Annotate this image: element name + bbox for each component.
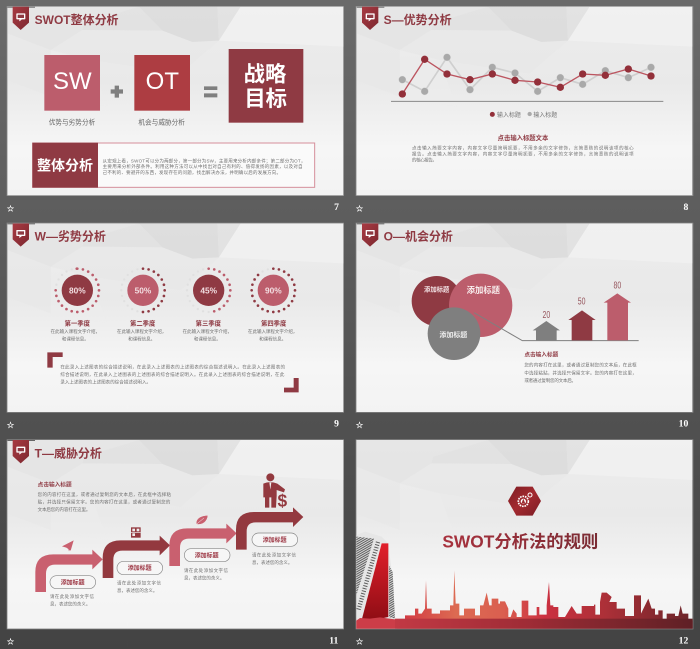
icon: businessman with dollar: $	[278, 490, 288, 510]
label Q4: 和课程信息。	[259, 335, 286, 342]
strategy goal box: 目标	[244, 87, 287, 111]
OT square	[134, 55, 190, 111]
footer star: ☆	[356, 421, 364, 431]
footer star: ☆	[356, 204, 364, 214]
footer star: ☆	[7, 421, 15, 431]
donut 80%: 80%	[69, 285, 86, 295]
body text: 中选择粘贴，并选择只保留文字。您的内容打在这里，	[524, 369, 637, 376]
donut 45%	[187, 269, 230, 312]
arrow step 3	[169, 524, 237, 566]
donut 90%: 90%	[265, 285, 282, 295]
body text	[60, 363, 285, 385]
panel: slide 10 opportunities	[356, 223, 693, 431]
step 4 text: 息，表述您的含义。	[252, 559, 292, 566]
title: SWOT分析法的规则	[442, 532, 598, 552]
donut 45%: 45%	[200, 285, 218, 295]
step 1 pill	[50, 576, 96, 589]
arrow 80: 80	[613, 279, 621, 291]
line chart	[391, 54, 663, 101]
strategy goal box: 战略	[244, 63, 287, 87]
overview box: 主要用来分析外部条件。利用这种方法可以从中找出对自己有利的、值得发扬的因素，以及对自	[103, 163, 303, 170]
step 1 pill: 添加标题	[61, 578, 85, 586]
step 2 text	[117, 579, 161, 594]
label Q2: 和课程信息。	[128, 335, 155, 342]
icon: businessman with dollar	[263, 473, 288, 510]
subheading: 点击输入标题文本	[498, 133, 549, 142]
icon: leaf	[196, 515, 208, 525]
title: T—威胁分析	[35, 445, 102, 460]
building photo	[356, 532, 395, 629]
step 3 pill	[184, 549, 230, 562]
step 2 pill	[117, 561, 163, 575]
strategy goal box	[229, 49, 303, 123]
step 4 pill	[252, 533, 298, 546]
panel: slide 9 weaknesses	[7, 223, 344, 431]
page number: 9	[334, 419, 339, 430]
SW square	[44, 55, 100, 111]
body text	[38, 491, 171, 513]
skyline	[356, 570, 693, 629]
panel: slide 8 strengths	[356, 6, 693, 214]
title: O—机会分析	[384, 229, 453, 244]
step 1 text	[50, 593, 94, 608]
body text: 录入上述图表的上述图表的综合描述说明入。	[60, 378, 151, 385]
page number: 12	[679, 635, 689, 646]
chart legend: 输入标题	[497, 111, 521, 119]
step 2 text: 请在此处添加文字信	[117, 579, 161, 586]
label Q1: 第一季度	[65, 319, 91, 328]
arrow step 4	[236, 507, 303, 550]
arrow step 1	[35, 550, 103, 592]
donut 50%: 50%	[135, 285, 152, 295]
bracket top-left	[47, 352, 63, 368]
donut 50%	[121, 269, 165, 312]
step 3 pill: 添加标题	[195, 552, 219, 560]
plus sign	[111, 86, 123, 98]
body text	[524, 362, 637, 384]
page number: 8	[684, 202, 689, 213]
title: S—优势分析	[384, 12, 452, 27]
step 4 text	[252, 551, 296, 566]
body text: 您的内容打在这里，或者通过复制您的文本后，在此框	[524, 362, 637, 369]
donut 80%	[56, 269, 99, 312]
body text: 的核心报告。	[412, 157, 437, 164]
label Q1	[51, 319, 100, 342]
label Q3	[183, 319, 232, 342]
arrow 80	[604, 279, 631, 340]
chart legend: 输入标题	[533, 111, 557, 119]
chart legend	[490, 111, 557, 119]
footer star: ☆	[7, 204, 15, 214]
body text: 综合描述说明，在此录入上述图表的上述图表的综合描述说明入。在此录入上述图表的综合描述说明，在此	[60, 371, 285, 378]
panel: slide 11 threats	[7, 439, 344, 648]
leader line	[474, 313, 639, 341]
step 3 text: 息，表述您的含义。	[184, 575, 224, 582]
body text: 在此录入上述图表的综合描述说明，在此录入上述图表的上述图表的综合描述说明入。在此录入上述图表的	[60, 363, 285, 370]
overlapping circles: 添加标题	[424, 285, 450, 294]
footer star: ☆	[7, 638, 15, 648]
step 1 text: 请在此处添加文字信	[50, 593, 94, 600]
step 3 text	[184, 567, 228, 582]
body text: 您的内容打在这里，或者通过复制您的文本后，在此框中选择粘	[38, 491, 171, 498]
arrow 20	[533, 309, 560, 340]
body text: 或者通过复制您的文本后。	[524, 377, 576, 384]
icon: hexagon gear	[508, 487, 541, 516]
overview box	[32, 143, 315, 188]
icon: header ribbon	[7, 223, 35, 247]
step 2 text: 息，表述您的含义。	[117, 587, 157, 594]
page number: 7	[334, 202, 339, 213]
panel: slide 7 SWOT overview	[7, 6, 344, 214]
step 4 text: 请在此处添加文字信	[252, 551, 296, 558]
overlapping circles: 添加标题	[467, 285, 501, 295]
label Q1: 和课程信息。	[62, 335, 89, 342]
label Q2: 在此输入课程文字介绍，	[117, 328, 166, 335]
label Q4	[248, 319, 297, 342]
overlapping circles	[412, 274, 512, 360]
overview box: 己不利的、要避开的东西，发现存在的问题，找出解决办法，并明确以后的发展方向。	[103, 169, 281, 176]
arrow step 2	[103, 536, 170, 578]
label Q4: 第四季度	[261, 319, 287, 328]
caption SW: 优势与劣势分析	[49, 117, 96, 126]
icon: header ribbon	[357, 223, 384, 247]
icon: paper plane	[62, 540, 74, 551]
body text: 贴，并选择只保留文字。您的内容打在这里，或者通过复制您的	[38, 499, 171, 506]
icon: header ribbon	[357, 7, 384, 30]
footer star: ☆	[356, 638, 364, 648]
step 4 pill: 添加标题	[263, 536, 287, 544]
donut 90%	[252, 269, 295, 312]
body text: 点击输入简要文字内容，内容文字尽量简明扼要，不用多余的文字修饰，言简意赅的说明该项的核心	[412, 144, 634, 151]
label Q2: 第二季度	[130, 319, 156, 328]
label Q2	[117, 319, 166, 342]
step 2 pill: 添加标题	[128, 564, 152, 572]
OT square: OT	[146, 68, 179, 95]
arrow 50	[568, 295, 596, 340]
body text	[412, 144, 634, 164]
label Q1: 在此输入课程文字介绍，	[51, 328, 100, 335]
step 1 text: 息，表述您的含义。	[50, 601, 90, 608]
arrow 20: 20	[542, 309, 550, 320]
title: W—劣势分析	[35, 229, 106, 244]
body text: 报告。点击输入简要文字内容，内容文字尽量简明扼要，不用多余的文字修饰，言简意赅的说明该项	[412, 151, 634, 158]
overview box: 整体分析	[37, 158, 93, 174]
panel: slide 12 section title	[356, 439, 693, 648]
label Q3: 在此输入课程文字介绍，	[183, 328, 232, 335]
page number: 10	[679, 419, 689, 430]
step 3 text: 请在此处添加文字信	[184, 567, 228, 574]
bracket bottom-right	[284, 378, 299, 392]
overview box: 从宏观上看，SWOT可以分为两部分，第一部分为SW，主要用来分析内部条件；第二部分为OT，	[103, 157, 305, 164]
icon: header ribbon	[7, 7, 35, 30]
icon: header ribbon	[7, 440, 35, 463]
page number: 11	[329, 635, 339, 646]
label Q3: 第三季度	[196, 319, 222, 328]
subheading: 点击输入标题	[524, 350, 559, 358]
overlapping circles: 添加标题	[439, 330, 467, 339]
title: SWOT整体分析	[35, 12, 119, 27]
body text: 文本后您的内容打在这里。	[38, 506, 90, 513]
equals sign	[204, 86, 217, 97]
arrow 50: 50	[578, 295, 586, 307]
icon: QR code	[131, 527, 141, 538]
subheading: 点击输入标题	[38, 480, 72, 488]
label Q3: 和课程信息。	[194, 335, 221, 342]
SW square: SW	[53, 68, 92, 95]
label Q4: 在此输入课程文字介绍，	[248, 328, 297, 335]
caption OT: 机会与威胁分析	[138, 117, 185, 126]
